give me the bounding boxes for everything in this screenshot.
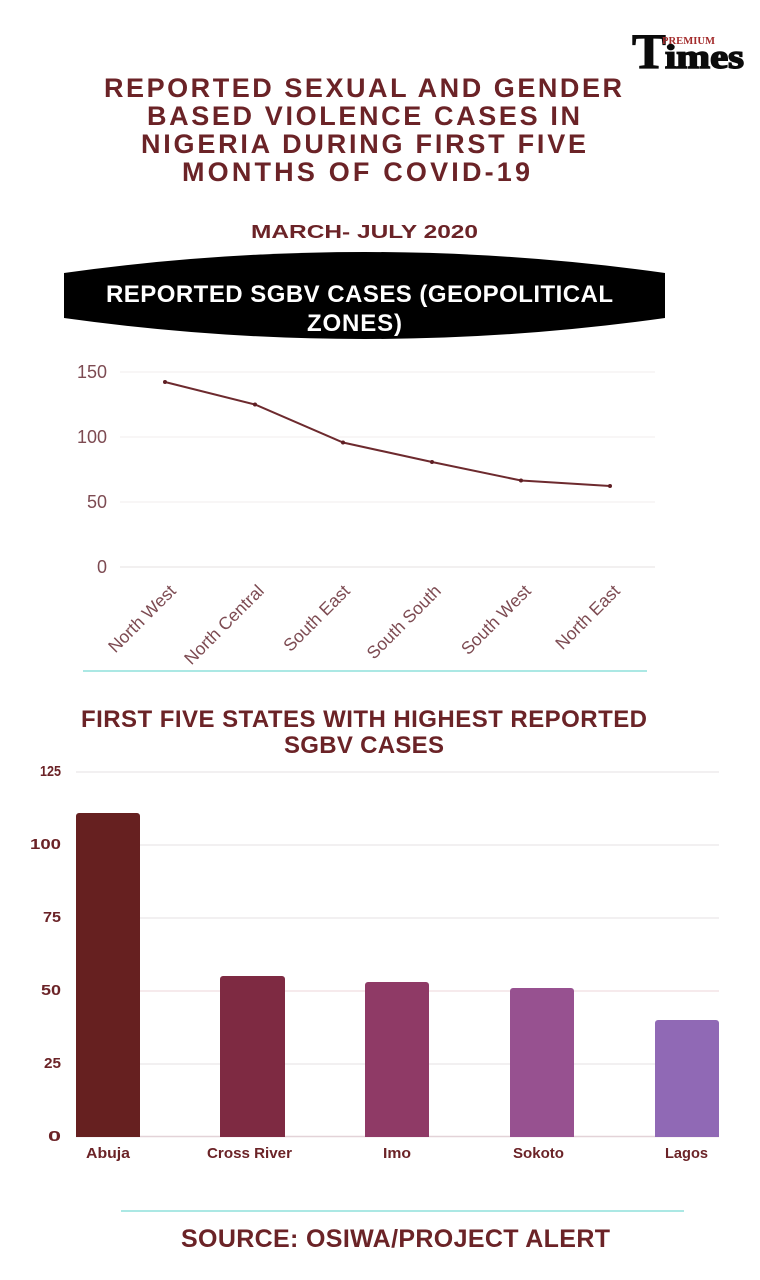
y axis labels: 100 <box>77 427 107 447</box>
y axis labels: 50 <box>41 982 61 999</box>
x axis labels: South West <box>457 581 535 659</box>
y axis labels: 50 <box>87 492 107 512</box>
heading: first five states <box>81 706 647 759</box>
bar chart: states <box>30 763 719 1162</box>
y axis labels: 0 <box>48 1128 61 1145</box>
logo: Premium Times: PREMIUM <box>662 36 716 47</box>
logo: Premium Times: imes <box>665 39 744 76</box>
data line <box>163 380 612 488</box>
heading: first five states: FIRST FIVE STATES WITH HIGHEST REPORTED <box>81 706 647 733</box>
x axis labels: Abuja <box>86 1145 131 1162</box>
title: MONTHS OF COVID-19 <box>182 157 530 187</box>
x axis labels: Lagos <box>665 1145 708 1162</box>
y axis labels <box>77 362 107 577</box>
title: REPORTED SEXUAL AND GENDER <box>104 73 622 103</box>
banner: geopolitical zones heading: ZONES) <box>307 310 402 337</box>
bars <box>76 813 719 1137</box>
x axis labels: Cross River <box>207 1145 292 1162</box>
banner: geopolitical zones heading: REPORTED SGBV CASES (GEOPOLITICAL <box>106 281 613 308</box>
banner: geopolitical zones heading <box>64 252 665 339</box>
date subtitle: MARCH- JULY 2020 <box>251 222 478 242</box>
line chart: cases by geopolitical zone <box>77 362 655 668</box>
title: NIGERIA DURING FIRST FIVE <box>141 129 586 159</box>
logo: Premium Times: T <box>632 23 666 79</box>
title: BASED VIOLENCE CASES IN <box>147 101 580 131</box>
logo: Premium Times <box>632 23 744 79</box>
y axis labels: 75 <box>43 909 61 926</box>
x axis labels: North Central <box>180 581 268 668</box>
x axis labels: South East <box>279 581 354 655</box>
x axis labels: South South <box>363 581 445 663</box>
y axis labels: 150 <box>77 362 107 382</box>
y axis labels: 0 <box>97 557 107 577</box>
x axis labels <box>86 1145 708 1162</box>
y axis labels: 100 <box>30 836 61 853</box>
x axis labels: North East <box>551 581 624 653</box>
y axis labels <box>30 763 61 1145</box>
source: SOURCE: OSIWA/PROJECT ALERT <box>181 1225 610 1253</box>
y axis labels: 125 <box>40 763 61 780</box>
y axis labels: 25 <box>44 1055 61 1072</box>
x axis labels <box>104 581 624 668</box>
title <box>104 73 622 187</box>
x axis labels: Sokoto <box>513 1145 564 1162</box>
heading: first five states: SGBV CASES <box>284 732 444 759</box>
x axis labels: Imo <box>383 1145 411 1162</box>
x axis labels: North West <box>104 581 180 656</box>
